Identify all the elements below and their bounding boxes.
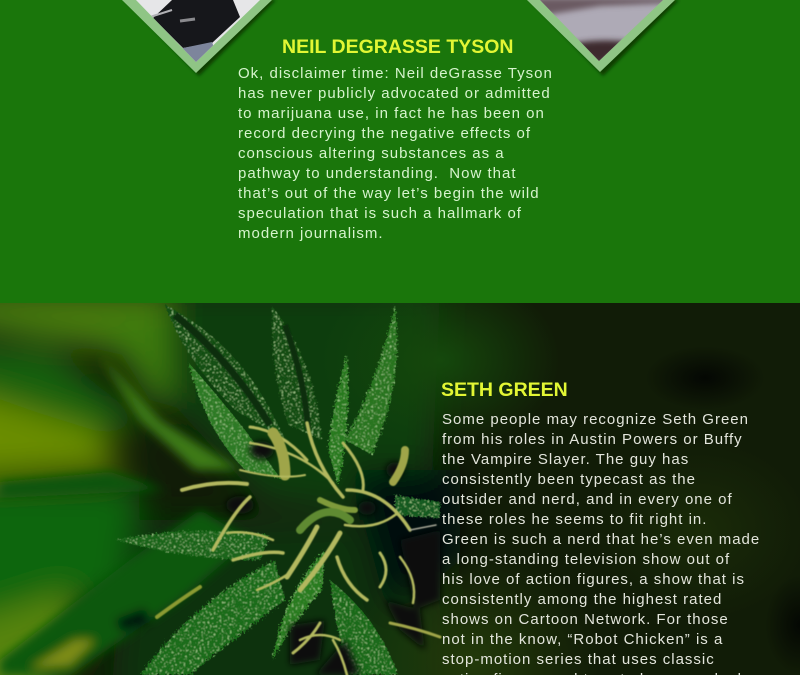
text block: Neil deGrasse Tyson description: has never publicly advocated or admitted xyxy=(238,85,551,102)
text block: Seth Green description: stop-motion series that uses classic xyxy=(442,651,715,668)
text block: Neil deGrasse Tyson description: conscious altering substances as a xyxy=(238,145,505,162)
text block: Seth Green description: consistently been typecast as the xyxy=(442,471,696,488)
text block: Neil deGrasse Tyson description: pathway to understanding. Now that xyxy=(238,165,516,182)
text block: Neil deGrasse Tyson description: to marijuana use, in fact he has been on xyxy=(238,105,545,122)
text block: Seth Green description: these roles he seems to fit right in. xyxy=(442,511,707,528)
text block: Seth Green description xyxy=(442,411,760,675)
text block: Neil deGrasse Tyson description: that’s out of the way let’s begin the wild xyxy=(238,185,540,202)
text block: Seth Green description: Green is such a nerd that he’s even made xyxy=(442,531,760,548)
text block: Seth Green description: a long-standing television show out of xyxy=(442,551,730,568)
text block: Seth Green description: Some people may recognize Seth Green xyxy=(442,411,749,428)
icon: right diamond portrait xyxy=(527,0,679,76)
heading: Neil deGrasse Tyson: NEIL DEGRASSE TYSON xyxy=(282,36,514,58)
illustration: dark gaps around the bud xyxy=(226,441,440,675)
illustration: leaf midribs xyxy=(175,315,308,430)
text block: Neil deGrasse Tyson description: record decrying the negative effects of xyxy=(238,125,531,142)
text block: Seth Green description: the Vampire Slayer. The guy has xyxy=(442,451,689,468)
text block: Neil deGrasse Tyson description: speculation that is such a hallmark of xyxy=(238,205,522,222)
icon: left diamond portrait xyxy=(122,0,276,76)
text block: Seth Green description: consistently among the highest rated xyxy=(442,591,722,608)
panel: cannabis photo section xyxy=(0,303,800,675)
background glows on the right xyxy=(320,270,800,675)
text block: Seth Green description: shows on Cartoon Network. For those xyxy=(442,611,729,628)
text block: Seth Green description: outsider and nerd, and in every one of xyxy=(442,491,733,508)
panel: green top section xyxy=(122,0,679,77)
illustration: cannabis leaves xyxy=(115,305,440,675)
text block: Seth Green description: not in the know, “Robot Chicken” is a xyxy=(442,631,723,648)
text block: Seth Green description: from his roles in Austin Powers or Buffy xyxy=(442,431,743,448)
text block: Neil deGrasse Tyson description: Ok, disclaimer time: Neil deGrasse Tyson xyxy=(238,65,553,82)
text block: Neil deGrasse Tyson description: modern journalism. xyxy=(238,225,384,242)
text block: Seth Green description: his love of action figures, a show that is xyxy=(442,571,745,588)
text block: Neil deGrasse Tyson description xyxy=(238,65,553,242)
blurred background xyxy=(0,290,460,675)
heading: Seth Green: SETH GREEN xyxy=(441,379,568,401)
illustration: pistils xyxy=(157,423,440,675)
